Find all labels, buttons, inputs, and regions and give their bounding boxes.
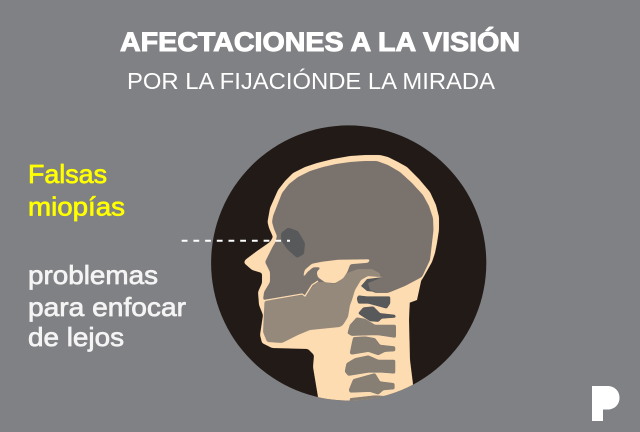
peach base of skull	[351, 276, 422, 303]
orbit	[281, 228, 305, 258]
text block: problemas para enfocar de lejos: problemas	[28, 260, 158, 290]
heading: falsas miopías: Falsas	[28, 159, 107, 189]
heading: falsas miopías	[28, 159, 125, 222]
head silhouette	[244, 155, 439, 410]
subtitle: POR LA FIJACIÓNDE LA MIRADA	[127, 68, 496, 94]
vertebrae	[345, 296, 396, 408]
sphenoid bone	[303, 260, 370, 283]
logo: P	[592, 386, 620, 421]
skull interior	[263, 161, 434, 302]
dashed sight line	[182, 240, 290, 242]
text block: problemas para enfocar de lejos: para enfocar	[28, 292, 186, 322]
icon: head x-ray in circle	[211, 125, 486, 410]
text block: problemas para enfocar de lejos	[28, 260, 186, 352]
jaw line	[264, 281, 318, 300]
jaw	[263, 269, 381, 343]
dark sliver under skull	[361, 277, 383, 292]
title: AFECTACIONES A LA VISIÓN	[120, 26, 520, 57]
text block: problemas para enfocar de lejos: de lejos	[28, 322, 124, 352]
heading: falsas miopías: miopías	[28, 192, 125, 222]
